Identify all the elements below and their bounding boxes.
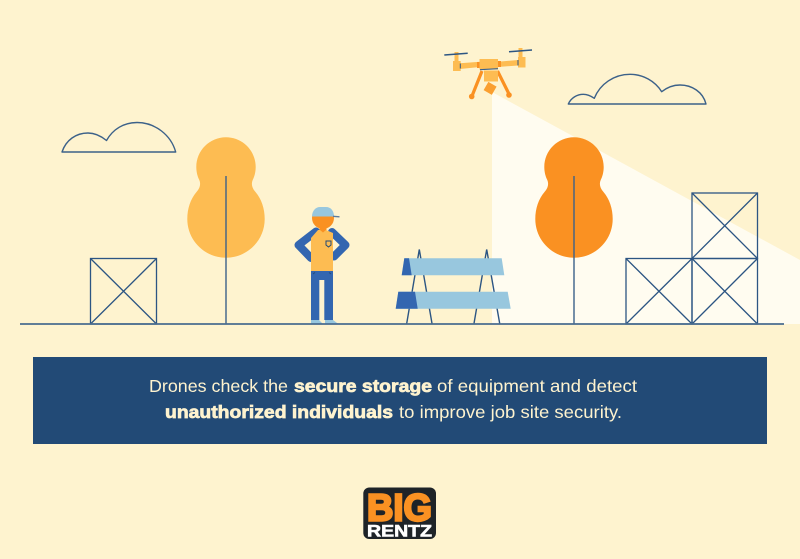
- cloud left: [62, 122, 176, 152]
- logo: BIG: [367, 488, 432, 530]
- drone: [444, 48, 532, 99]
- crate left: [90, 258, 156, 324]
- caption text: of equipment and detect: [437, 376, 637, 396]
- caption text: Drones check the: [149, 376, 288, 396]
- worker figure: [298, 207, 346, 324]
- logo: RENTZ: [367, 522, 432, 540]
- ground line: [20, 323, 784, 325]
- barrier: [396, 250, 511, 324]
- tree light: [187, 137, 265, 324]
- crate stack right: [626, 193, 758, 324]
- caption text: [149, 376, 637, 422]
- tree orange: [535, 137, 613, 324]
- cloud right: [568, 74, 706, 104]
- drone light beam: [492, 92, 800, 324]
- caption text: secure storage: [294, 376, 432, 396]
- caption text: to improve job site security.: [399, 402, 622, 422]
- caption text: unauthorized individuals: [165, 402, 393, 422]
- caption banner: [33, 357, 767, 444]
